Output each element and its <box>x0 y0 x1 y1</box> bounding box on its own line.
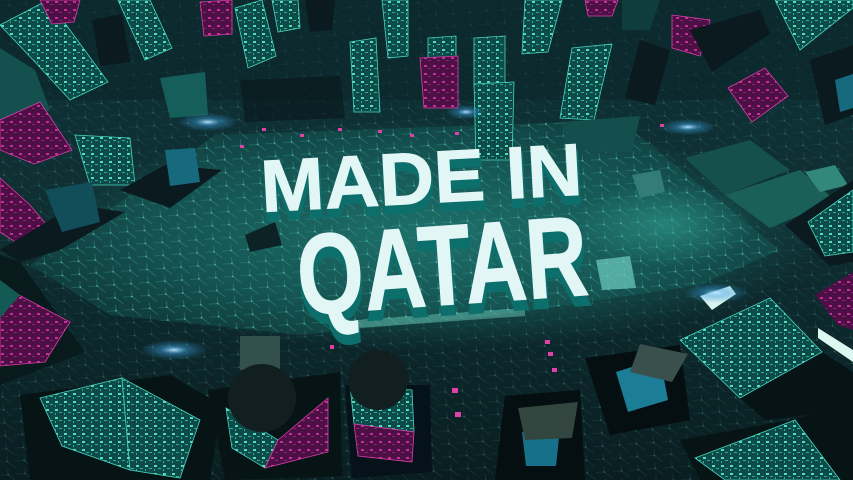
heading face: QATAR <box>293 193 592 340</box>
dark pillars and pads, upper <box>0 0 853 262</box>
heading face: MADE IN <box>258 128 584 228</box>
lower center left cube with dark cap <box>208 336 342 480</box>
heading shadow and extrusion: QATAR <box>294 202 593 349</box>
blue cylinders <box>45 74 853 232</box>
central glowing circuit area <box>30 120 820 350</box>
title: MADE IN QATAR <box>258 128 593 349</box>
right side heat-sink block <box>632 140 848 228</box>
heading shadow and extrusion: MADE IN <box>259 136 585 236</box>
heading shadow and extrusion <box>259 136 593 349</box>
lower right teal buildings <box>680 298 853 480</box>
lower center right cube with dark cap <box>345 350 432 478</box>
lower left teal cube <box>20 375 222 480</box>
lower right pads and blue pillars <box>495 344 690 480</box>
upper city: teal towers <box>0 0 853 185</box>
left side magenta cube <box>0 255 85 385</box>
heading face <box>258 128 592 340</box>
upper city: magenta towers <box>0 0 788 245</box>
magenta circuit dots <box>240 124 664 417</box>
right side towers <box>700 180 853 330</box>
lens flares <box>140 105 748 360</box>
